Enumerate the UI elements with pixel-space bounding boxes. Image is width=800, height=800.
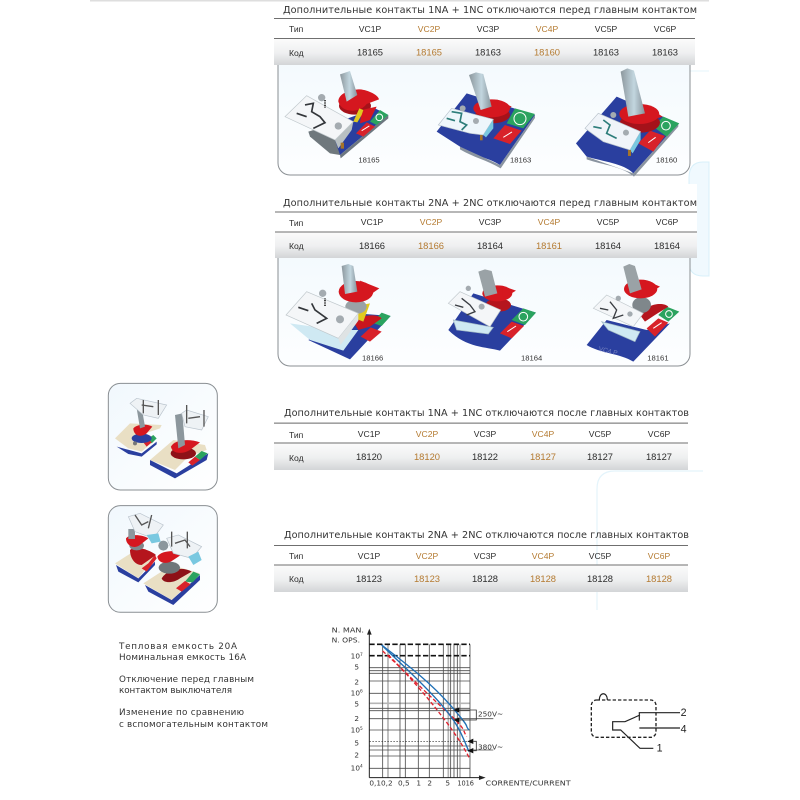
table 2: VC6P [656,217,678,227]
device 18166 [286,264,391,362]
background decorative shapes [90,0,709,610]
table 2: 18164 [477,240,503,251]
contact schematic: 1 [657,743,663,755]
chart axis labels: 5 [354,738,359,747]
table 2: VC5P [597,217,619,227]
table 3: VC4P [532,429,554,439]
chart axes [367,629,486,780]
table 3: VC1P [358,429,380,439]
chart axis labels: 5 [445,779,450,788]
table 2: 18166 [359,240,385,251]
panel: devices, second group [278,235,690,366]
table 3: 18120 [414,451,440,462]
device 18161: VC4 P [598,346,619,357]
table 1: Код [289,48,304,58]
table 1: 18163 [475,46,501,58]
text block: characteristics: Отключение перед главным [119,675,254,685]
chart grid [369,644,493,778]
table 3: VC6P [648,429,670,439]
thumbnail panel: single contact devices [108,383,217,490]
device 18160 [576,68,679,177]
chart axis labels: 2 [354,677,359,686]
table 2: Тип [289,218,304,228]
thumbnail panel: double contact devices [108,506,217,612]
title 1: Дополнительные контакты 1NA + 1NC отключаются перед главным контактом [283,5,697,16]
table 1: VC6P [654,24,676,34]
device 18161 [587,264,679,362]
chart axis labels: 2 [354,751,359,760]
contact schematic: 2 [681,707,687,719]
text block: characteristics: с вспомогательным контактом [119,720,268,730]
table 2: 18161 [536,240,562,251]
contact schematic [591,694,687,755]
table 3: 18122 [472,451,498,462]
table 1: 18160 [534,46,560,58]
table 1: VC1P [359,24,381,34]
table 4: VC3P [474,551,496,561]
text block: characteristics: Изменение по сравнению [119,708,244,718]
table 4: VC1P [358,551,380,561]
title 3: Дополнительные контакты 1NA + 1NC отключаются после главных контактов [284,408,689,419]
text block: characteristics: контактом выключателя [119,686,232,696]
table 2: 18164 [595,240,621,251]
text block: characteristics: Тепловая емкость 20A [118,642,237,652]
table 3: 18127 [646,451,672,462]
small device [115,513,163,582]
chart axis labels: 1016 [457,779,474,788]
table 3: 18120 [356,451,382,462]
device 18166: 18166 [362,353,383,362]
table 3: VC2P [416,429,438,439]
chart axis labels: 2 [427,779,432,788]
table 1: VC3P [477,24,499,34]
chart axis labels: 4 [360,764,363,770]
chart axis labels: 1 [416,779,421,788]
devices row 2 [286,264,679,362]
chart: operations vs current [332,626,571,788]
chart axis labels: 10 [351,688,360,697]
table 1: VC2P [418,24,440,34]
table 2: Код [289,241,304,251]
chart axis labels: 0,10,2 [369,779,393,788]
table 3: 18127 [587,451,613,462]
table 4: VC4P [532,551,554,561]
panel: devices, first group [278,40,690,177]
chart curves [382,645,469,757]
table 1: VC4P [536,24,558,34]
table 3: VC3P [474,429,496,439]
title 4: Дополнительные контакты 2NA + 2NC отключаются после главных контактов [284,530,689,541]
chart axis labels: N. MAN. [332,626,364,635]
chart axis labels: N. OPS. [332,636,360,645]
table 4: 18128 [530,573,556,584]
table 1: 18163 [593,46,619,58]
table 1: 18163 [652,46,678,58]
device 18161: 18161 [647,353,669,362]
table 4: 18123 [356,573,382,584]
table 2: VC4P [538,217,560,227]
chart axis labels: 5 [360,726,363,732]
devices row 1 [285,68,679,177]
table 4: VC2P [416,551,438,561]
title 2: Дополнительные контакты 2NA + 2NC отключаются перед главным контактом [283,198,697,209]
chart axis labels: 5 [354,699,359,708]
table 4: VC6P [648,551,670,561]
chart markers and voltage brackets: 250V~ [478,710,503,719]
table 2: VC2P [420,217,442,227]
table 2: VC1P [361,217,383,227]
chart axis labels: 6 [360,689,363,695]
small device [115,398,167,457]
table 4: 18128 [472,573,498,584]
table 4: Код [289,574,304,584]
chart axis labels: 10 [351,763,360,772]
device 18163 [437,72,535,168]
table 3: Тип [289,430,304,440]
table 4: 18128 [646,573,672,584]
text block: characteristics [118,642,268,730]
table 2: VC3P [479,217,501,227]
table 4: 18123 [414,573,440,584]
table 4: VC5P [589,551,611,561]
table 1: 18165 [416,46,442,58]
large device [143,532,202,605]
contact schematic: 4 [681,724,687,736]
device 18164: 18164 [521,353,543,362]
chart axis labels: 10 [351,652,360,661]
text block: characteristics: Номинальная емкость 16A [119,653,246,663]
table 1 [274,5,697,65]
device 18165: 18165 [358,155,380,164]
table 1: VC5P [595,24,617,34]
table 1: Тип [289,24,304,34]
chart markers and voltage brackets: 380V~ [478,742,503,751]
table 2: 18166 [418,240,444,251]
device 18160: 18160 [656,155,677,164]
table 3: 18127 [530,451,556,462]
device 18164 [448,269,543,362]
chart axis labels: CORRENTE/CURRENT [486,779,571,788]
table 4: Тип [289,551,304,561]
chart axis labels: 5 [354,663,359,672]
chart markers and voltage brackets [453,707,503,753]
table 4 [274,530,689,592]
table 2 [275,198,697,258]
table 4: 18128 [587,573,613,584]
table 1: 18165 [357,46,383,58]
chart axis labels: 2 [354,714,359,723]
chart axis labels: 10 [351,726,360,735]
table 3: Код [289,453,304,463]
device 18163: 18163 [510,155,531,164]
chart axis labels: 0,5 [398,779,410,788]
device 18165 [285,71,388,164]
large device [150,405,208,478]
table 3 [274,408,689,470]
table 3: VC5P [589,429,611,439]
table 2: 18164 [654,240,680,251]
chart axis labels [332,626,571,788]
chart axis labels: 7 [360,652,363,658]
